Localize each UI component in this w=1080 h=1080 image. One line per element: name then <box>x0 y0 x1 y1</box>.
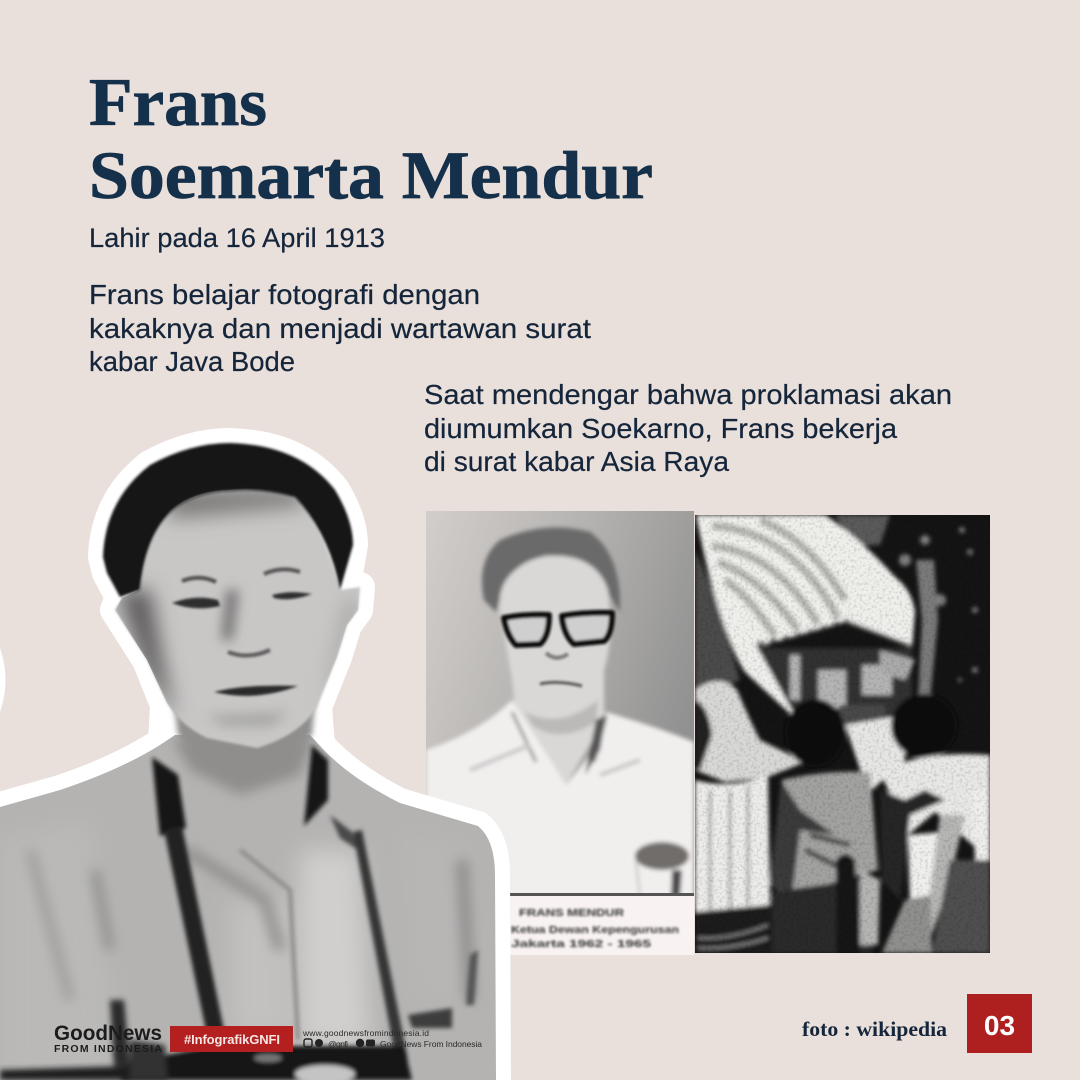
title: Frans <box>89 64 267 140</box>
camera <box>120 1046 412 1080</box>
nose and mouth <box>540 653 582 686</box>
centre man shirt <box>770 772 878 895</box>
portrait cutout of Frans Mendur <box>0 443 496 1080</box>
hashtag badge <box>170 1026 293 1052</box>
photo: older Frans portrait with caption: Ketua Dewan Kepengurusan <box>511 924 679 936</box>
textured dark patch <box>695 550 740 700</box>
under canopy building <box>755 648 912 725</box>
hair <box>103 443 353 597</box>
text block: learning photography: kakaknya dan menjadi wartawan surat <box>89 313 591 344</box>
text block: learning photography: kabar Java Bode <box>89 346 295 377</box>
page number badge: 03 <box>984 1010 1015 1041</box>
left strap <box>164 826 226 1040</box>
face <box>115 490 360 748</box>
photo: older Frans portrait with caption: FRANS MENDUR <box>519 907 625 919</box>
footer contact links: www.goodnewsfromindonesia.id <box>302 1028 429 1038</box>
left eye <box>172 598 220 608</box>
icon: youtube <box>366 1040 375 1046</box>
white sticker outline <box>0 443 496 1080</box>
left striped shirt <box>695 775 770 912</box>
dark streak by left arm <box>110 1000 130 1066</box>
icon: facebook <box>356 1039 364 1047</box>
footer contact links: @gnfi <box>328 1039 348 1049</box>
face and neck <box>500 556 610 785</box>
arms and skirt <box>908 832 940 905</box>
hashtag badge: #InfografikGNFI <box>184 1032 280 1047</box>
footer contact links: GoodNews From Indonesia <box>380 1039 482 1049</box>
text block: learning photography: Frans belajar fotografi dengan <box>89 279 480 310</box>
shirt folds and straps <box>0 735 480 1080</box>
neck <box>172 690 316 762</box>
right eye <box>272 592 312 599</box>
right collar strap <box>304 745 328 826</box>
film grain <box>695 515 990 953</box>
footer logo: GoodNews from Indonesia <box>54 1022 162 1055</box>
flag and canopy <box>696 515 915 721</box>
birth date: Lahir pada 16 April 1913 <box>89 223 385 253</box>
trunk <box>916 560 938 700</box>
footer logo: GoodNews from Indonesia: FROM INDONESIA <box>54 1043 162 1055</box>
text block: learning photography <box>89 279 591 377</box>
jaw shadow <box>525 700 598 734</box>
photo: older Frans portrait with caption: Jakarta 1962 - 1965 <box>511 938 651 950</box>
text block: proclamation: diumumkan Soekarno, Frans bekerja <box>424 413 898 444</box>
face shading and features <box>118 488 362 726</box>
footer logo: GoodNews from Indonesia: GoodNews <box>54 1022 162 1045</box>
text block: proclamation: di surat kabar Asia Raya <box>424 446 730 477</box>
centre man head <box>785 699 845 767</box>
footer contact links <box>302 1028 482 1049</box>
nose <box>228 650 270 656</box>
text block: proclamation <box>424 379 952 477</box>
veiled person <box>695 681 805 782</box>
caption plate <box>508 896 694 955</box>
hair <box>482 528 620 612</box>
placket shadow <box>240 850 298 1040</box>
page number badge <box>967 994 1032 1053</box>
left collar strap <box>152 757 186 836</box>
text block: proclamation: Saat mendengar bahwa proklamasi akan <box>424 379 952 410</box>
icon: twitter <box>315 1039 323 1047</box>
white shirt <box>426 700 694 893</box>
right woman blouse <box>880 754 990 860</box>
right strap <box>353 830 408 1060</box>
shirt <box>0 735 496 1080</box>
pocket shadow <box>408 1008 452 1028</box>
title <box>89 64 653 213</box>
canopy stripes <box>712 520 845 636</box>
mouth <box>214 686 298 696</box>
collar shadow <box>512 712 606 762</box>
title: Soemarta Mendur <box>89 137 653 213</box>
neck shadow under chin <box>172 735 315 795</box>
white sticker fragment at left edge <box>0 648 6 712</box>
pen pocket <box>635 842 689 870</box>
eyeglasses <box>504 613 612 645</box>
foliage <box>835 515 890 545</box>
photo: older Frans portrait with caption <box>426 511 694 955</box>
icon: instagram <box>304 1039 312 1047</box>
light area between figures <box>845 715 905 790</box>
photo credit: foto : wikipedia <box>802 1017 948 1041</box>
photo: crowd at the proclamation <box>695 515 990 953</box>
right woman head <box>891 694 957 758</box>
centre man sarong <box>772 878 872 953</box>
